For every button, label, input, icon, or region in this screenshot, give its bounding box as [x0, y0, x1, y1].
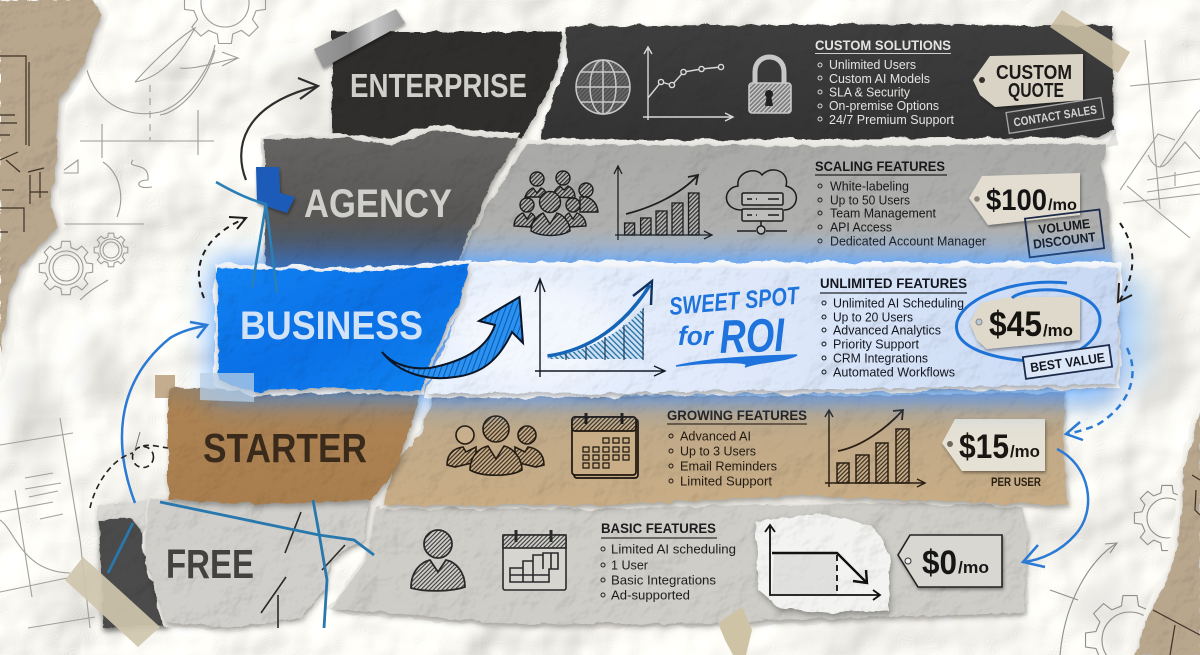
- price tag: $100: [969, 173, 1080, 225]
- text: scaling features: SCALING FEATURES: [815, 158, 945, 174]
- text: BUSINESS: BUSINESS: [240, 304, 423, 348]
- panel: starter details: [380, 389, 1070, 509]
- panel: business details: [424, 262, 1122, 398]
- icon: calendar with cells: [503, 530, 566, 590]
- text: unlimited features: [820, 275, 967, 380]
- text: scaling features: API Access: [830, 220, 892, 234]
- text: unlimited features: Priority Support: [833, 338, 920, 352]
- price tag: $15: [942, 419, 1045, 471]
- arrow: starter to business blue: [122, 322, 207, 503]
- text: ENTERPRISE: ENTERPRISE: [350, 67, 527, 104]
- text: unlimited features: CRM Integrations: [833, 352, 928, 366]
- text: custom solutions: Custom AI Models: [829, 72, 930, 86]
- price tag: custom quote: CUSTOM: [996, 62, 1072, 84]
- text: scaling features: Team Management: [830, 206, 937, 220]
- arrow: business to agency dashed: [199, 217, 246, 298]
- text: per user: PER USER: [991, 475, 1041, 489]
- price tag: $45 with circle: /mo: [1043, 321, 1073, 340]
- text: sweet spot for ROI: [668, 282, 802, 367]
- tape: top right: [1050, 10, 1130, 73]
- panel: business label: [214, 260, 473, 396]
- text: growing features: GROWING FEATURES: [667, 407, 807, 423]
- stamp: volume discount: [1025, 210, 1104, 257]
- text: growing features: Advanced AI: [680, 430, 751, 444]
- price tag: $15: $15: [959, 428, 1009, 466]
- text: FREE: FREE: [166, 541, 254, 587]
- chart: roi curve: [535, 279, 665, 377]
- text: unlimited features: Advanced Analytics: [833, 324, 941, 338]
- text: custom solutions: Unlimited Users: [829, 58, 916, 72]
- panel: agency label: [262, 125, 522, 270]
- panel: agency details: [453, 138, 1114, 268]
- text: basic features: Ad-supported: [611, 588, 690, 602]
- text: custom solutions: On-premise Options: [829, 99, 939, 113]
- price tag: custom quote: [973, 54, 1083, 107]
- tape: blue on agency: [256, 167, 295, 213]
- price tag: $45 with circle: $45: [989, 305, 1042, 344]
- text: custom solutions: CUSTOM SOLUTIONS: [815, 37, 951, 53]
- price tag: $15: /mo: [1010, 442, 1040, 461]
- pencil sketch: gears left: [39, 233, 128, 300]
- price tag: $100: /mo: [1048, 197, 1077, 214]
- text: basic features: BASIC FEATURES: [601, 520, 716, 536]
- icon: person: [411, 530, 465, 591]
- text: basic features: Limited AI scheduling: [611, 542, 736, 556]
- pencil sketches: top left: [60, 0, 266, 224]
- text: AGENCY: AGENCY: [304, 182, 452, 226]
- chart: crumpled paper decline: [756, 514, 890, 613]
- arrow: starter to free blue: [1023, 449, 1088, 567]
- panel: enterprise details: [535, 10, 1130, 148]
- tape: silver: [314, 9, 405, 68]
- chart: starter growth bars: [825, 410, 925, 487]
- text: growing features: Limited Support: [680, 474, 773, 488]
- text: sweet spot for ROI: for: [678, 321, 714, 351]
- text: unlimited features: UNLIMITED FEATURES: [820, 275, 967, 291]
- icon: globe: [576, 60, 630, 114]
- text: basic features: 1 User: [611, 558, 648, 572]
- arrow: agency to business dashed: [1118, 223, 1132, 302]
- stamp: volume discount: DISCOUNT: [1032, 229, 1097, 252]
- stamp: best value: BEST VALUE: [1029, 350, 1106, 375]
- text: sweet spot for ROI: SWEET SPOT: [668, 282, 802, 321]
- price tag: $45 with circle: [956, 282, 1100, 361]
- text: growing features: Up to 3 Users: [680, 444, 756, 458]
- icon: cloud server: [726, 170, 796, 234]
- tape: bottom center: [718, 607, 752, 655]
- arrow: business to starter dashed blue: [1066, 348, 1133, 440]
- icon: team of three: [447, 416, 544, 475]
- pencil sketch: right top house: [1120, 40, 1200, 238]
- chart: agency growth bars: [614, 166, 712, 240]
- text: custom solutions: [815, 37, 955, 127]
- text: scaling features: [815, 158, 986, 248]
- arrow: large blue upward: [382, 297, 523, 378]
- text: STARTER: STARTER: [203, 425, 367, 471]
- pencil sketch: lower right gears: [1050, 485, 1200, 655]
- text: basic features: Basic Integrations: [611, 574, 716, 588]
- price tag: $0: $0: [922, 544, 957, 582]
- blue glow behind business: [212, 260, 1148, 400]
- text: unlimited features: Automated Workflows: [833, 366, 955, 380]
- arrow: agency to enterprise: [241, 78, 318, 180]
- text: scaling features: Up to 50 Users: [830, 194, 910, 208]
- icon: calendar: [572, 413, 638, 478]
- panel: free label: [98, 496, 372, 630]
- text: sweet spot for ROI: ROI: [718, 308, 786, 363]
- price tag: custom quote: QUOTE: [1008, 80, 1064, 102]
- text: growing features: Email Reminders: [680, 460, 777, 474]
- text: unlimited features: Unlimited AI Scheduling: [833, 296, 964, 310]
- stamp: contact sales: CONTACT SALES: [1013, 103, 1098, 129]
- chart: enterprise line: [643, 47, 733, 121]
- tape: bottom left: [65, 557, 160, 647]
- icon: padlock: [749, 57, 791, 113]
- price tag: $0: [898, 535, 1002, 587]
- text: custom solutions: SLA & Security: [829, 86, 911, 100]
- text: growing features: [667, 407, 807, 488]
- text: custom solutions: 24/7 Premium Support: [829, 113, 955, 127]
- pencil sketch: lower left chart: [0, 418, 95, 628]
- string: blue knot: [216, 182, 277, 293]
- kraft paper scrap: bottom right: [1126, 400, 1200, 655]
- panel: free details: [327, 498, 1030, 628]
- tape: translucent on starter: [200, 373, 254, 402]
- text: unlimited features: Up to 20 Users: [833, 310, 913, 324]
- price tag: $100: $100: [986, 184, 1047, 217]
- text: scaling features: White-labeling: [830, 180, 909, 194]
- string: free label: [108, 500, 374, 628]
- arrow: free to starter dashed: [90, 432, 168, 508]
- panel: starter label: [155, 375, 420, 504]
- kraft paper scrap: top left with notes: [0, 0, 110, 383]
- stamp: volume discount: VOLUME: [1037, 216, 1091, 237]
- text: basic features: [601, 520, 736, 602]
- panel: enterprise label: [332, 32, 562, 138]
- text: scaling features: Dedicated Account Manager: [830, 234, 986, 248]
- icon: crowd of people: [514, 171, 598, 236]
- price tag: $0: /mo: [958, 558, 989, 577]
